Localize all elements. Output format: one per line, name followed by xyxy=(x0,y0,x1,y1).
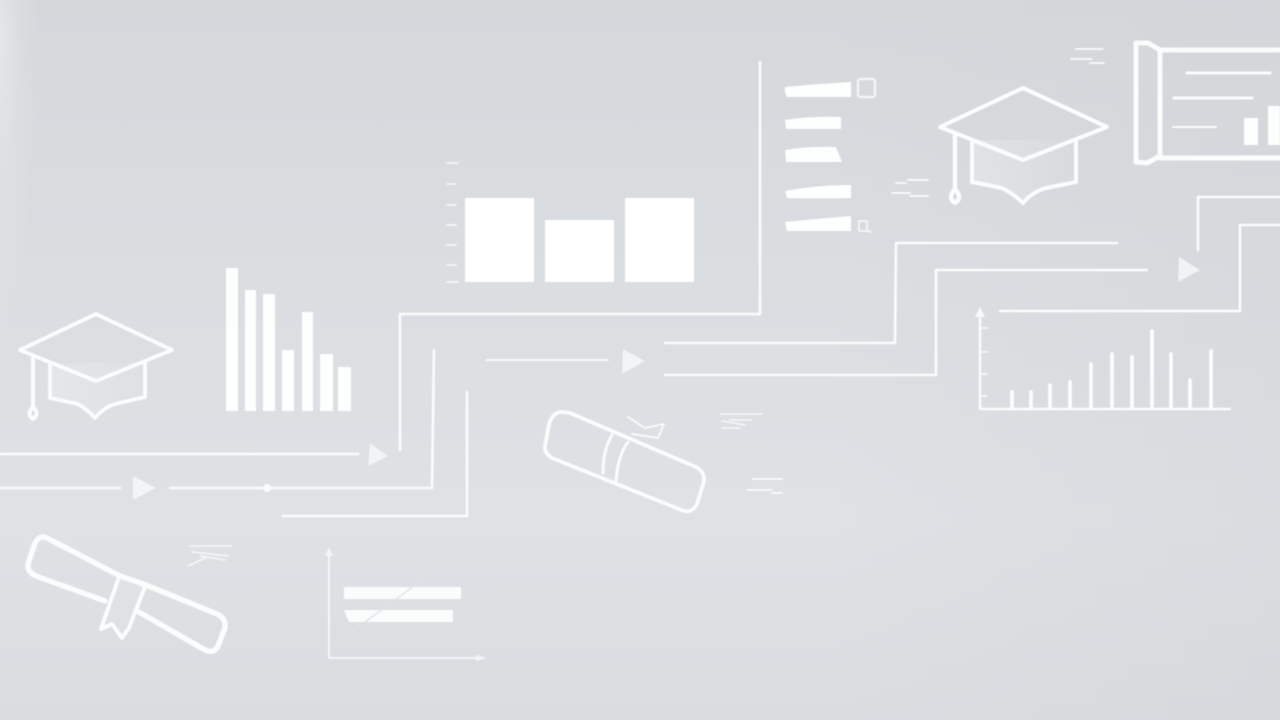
sketch marks: top right xyxy=(1071,49,1104,63)
diploma: centre xyxy=(545,412,704,511)
flow line: top path from left to tall vertical xyxy=(0,62,760,454)
document scroll: top right xyxy=(1136,43,1280,163)
line chart panel: lower right axis xyxy=(975,307,1230,409)
bars xyxy=(344,587,461,622)
flow line: chart top path xyxy=(1000,225,1280,311)
mini bars xyxy=(1244,106,1280,145)
axes xyxy=(980,314,1230,409)
arrow: left lower xyxy=(133,476,156,500)
sketch marks: beside cap xyxy=(892,180,928,196)
sketch marks: beside left diploma xyxy=(188,546,232,566)
flow line: lower path xyxy=(283,392,467,516)
arrow: left upper xyxy=(368,443,388,466)
ties xyxy=(628,417,664,438)
thin bars xyxy=(1012,331,1211,407)
ribbon xyxy=(101,577,146,638)
icon: small marker lower xyxy=(859,221,871,232)
rolled paper xyxy=(545,412,704,511)
flow line: top right corner path xyxy=(1198,197,1280,250)
axes xyxy=(329,553,480,658)
sketch marks: beside centre diploma xyxy=(720,414,762,428)
bar chart: left tall bars xyxy=(226,268,351,411)
sketch marks: lower centre xyxy=(747,479,782,493)
flow line: upper step path xyxy=(665,243,1117,343)
flow line: lower step path xyxy=(665,270,1147,375)
scale ticks xyxy=(447,163,458,282)
scroll roll xyxy=(1136,43,1160,163)
graduation cap: left xyxy=(20,314,172,419)
flow line: centre short segment xyxy=(486,359,608,361)
text lines xyxy=(1174,73,1270,98)
rolled paper xyxy=(28,537,225,651)
scroll sheet xyxy=(1160,50,1280,158)
arrow: centre xyxy=(622,349,645,374)
icon: small square marker xyxy=(858,79,875,97)
flow line: middle path with node xyxy=(0,350,434,492)
diploma: left xyxy=(28,537,225,651)
horizontal bar chart: bottom left xyxy=(325,547,487,661)
y ticks xyxy=(980,328,987,396)
horizontal list bars xyxy=(785,82,851,231)
large bars xyxy=(465,198,694,282)
band xyxy=(603,435,628,481)
trend line xyxy=(350,563,445,633)
axis arrows xyxy=(325,547,487,661)
bar chart: centre three bars xyxy=(447,163,694,282)
arrow: right xyxy=(1178,257,1200,282)
axis arrow xyxy=(975,307,985,317)
graduation cap: top right xyxy=(940,88,1107,203)
